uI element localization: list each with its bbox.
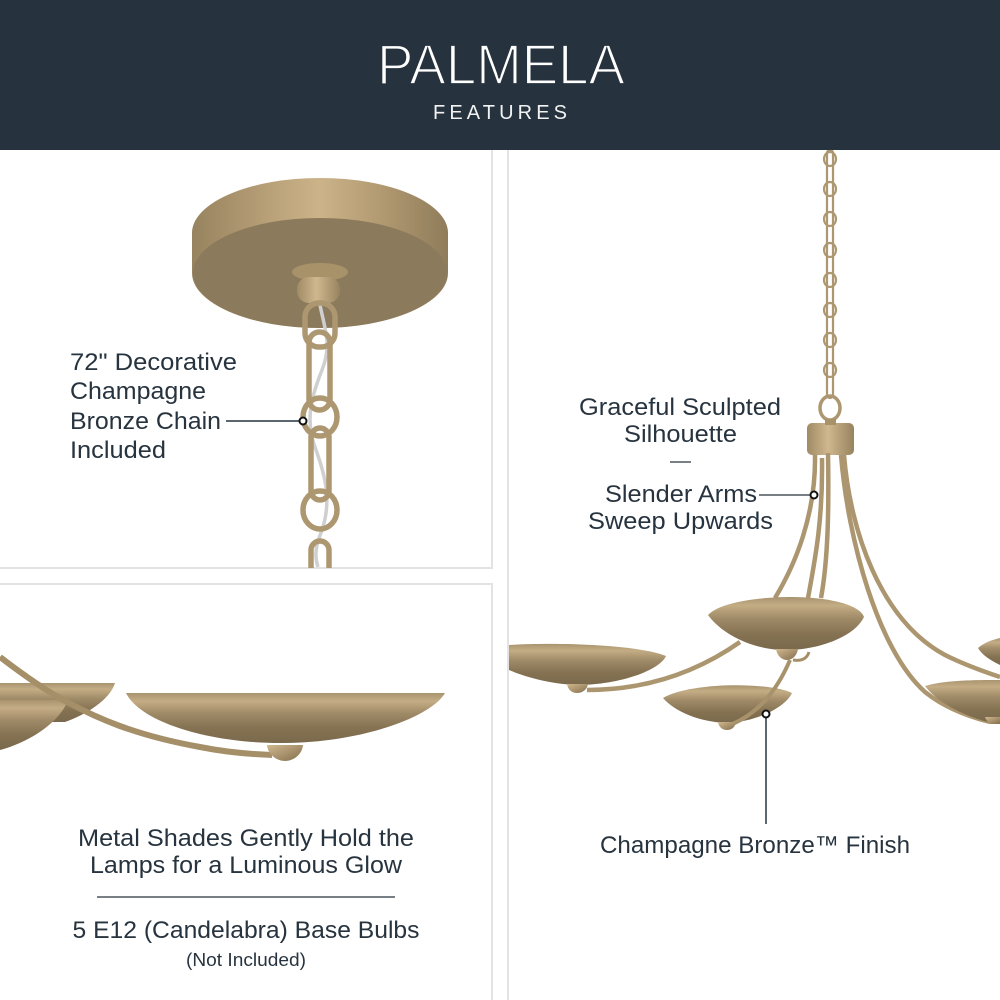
callout: silhouette xyxy=(579,394,781,462)
callout: chain: Bronze Chain xyxy=(70,408,221,435)
icon: shade center xyxy=(708,597,864,660)
callout: arms: Sweep Upwards xyxy=(588,508,773,535)
callout: chain: Champagne xyxy=(70,378,206,405)
icon: cord xyxy=(310,305,327,567)
icon: large shade xyxy=(126,693,445,761)
chain links xyxy=(303,303,337,568)
callout: arms xyxy=(588,481,818,535)
shade text: 5 E12 (Candelabra) Base Bulbs xyxy=(72,917,420,944)
title: PALMELA xyxy=(377,33,625,97)
callout: silhouette: Graceful Sculpted xyxy=(579,394,781,421)
icon: back shades xyxy=(0,683,115,750)
callout: finish xyxy=(600,710,910,859)
shade text xyxy=(72,825,420,970)
panel: chain detail xyxy=(0,140,492,568)
callout: silhouette: Silhouette xyxy=(624,421,737,448)
callout: chain: 72" Decorative xyxy=(70,349,237,376)
header banner xyxy=(0,0,1000,150)
icon: ferrule xyxy=(807,419,854,455)
subtitle: FEATURES xyxy=(433,102,567,124)
callout: chain xyxy=(70,349,306,464)
icon: shade right lower xyxy=(925,680,1000,724)
icon: hanging chain xyxy=(820,150,840,420)
icon: shade right upper xyxy=(978,638,1000,665)
icon: arm xyxy=(0,657,272,755)
canopy xyxy=(192,178,448,328)
callout: finish: Champagne Bronze™ Finish xyxy=(600,832,910,859)
callout: chain: Included xyxy=(70,437,166,464)
shade text: Lamps for a Luminous Glow xyxy=(90,852,402,879)
panel: shade detail xyxy=(0,584,492,1000)
shade text: Metal Shades Gently Hold the xyxy=(78,825,414,852)
icon: arms xyxy=(587,453,1000,722)
panel: full fixture xyxy=(508,140,1000,1000)
callout: arms: Slender Arms xyxy=(605,481,757,508)
icon: shade left xyxy=(509,644,666,693)
shade text: (Not Included) xyxy=(186,950,306,970)
icon: shade front xyxy=(663,660,792,730)
